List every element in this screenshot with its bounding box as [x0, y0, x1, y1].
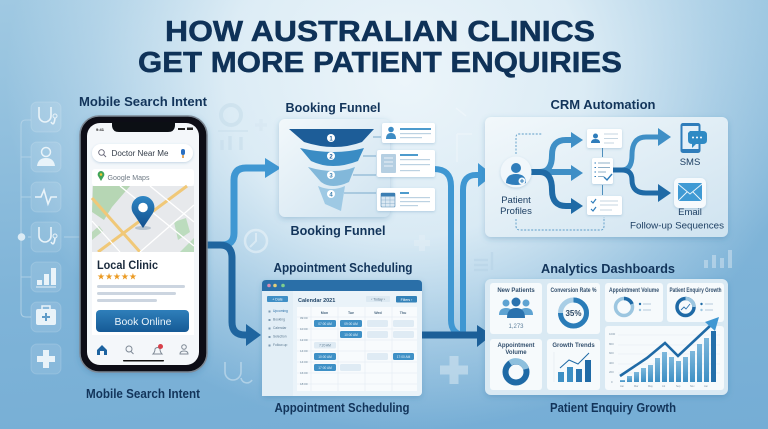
panel: calendar: [262, 280, 422, 396]
calendar grid: 10:00 AM: [344, 333, 358, 337]
calendar grid: 10:00: [300, 327, 308, 331]
calendar sidebar: Selection: [273, 334, 287, 338]
card: patient: [382, 123, 435, 143]
icon: doctor tile: [31, 142, 61, 172]
clinic card: Local Clinic: [97, 260, 159, 272]
title: GET MORE PATIENT ENQUIRIES: [138, 47, 622, 79]
calendar header: ‹ Today ›: [371, 298, 386, 302]
calendar sidebar: Upcoming: [273, 309, 288, 313]
card: growth trends: Growth Trends: [552, 343, 595, 349]
icon: map pin: [132, 196, 154, 230]
calendar grid: 18:00: [300, 382, 308, 386]
icon: first aid tile: [31, 302, 61, 332]
card: appointment volume donut: [490, 339, 542, 390]
title: HOW AUSTRALIAN CLINICS: [165, 16, 595, 48]
card: patient enquiry growth chart: May: [648, 385, 653, 388]
funnel chart: 2: [329, 154, 333, 160]
button: book online: Book Online: [114, 316, 172, 328]
card: appointment volume small: [605, 283, 663, 322]
icon: plus tile: [31, 344, 61, 374]
card: new patients: 1,273: [508, 324, 524, 330]
calendar grid: 17:00 AM: [318, 366, 332, 370]
icon: stethoscope tile two: [31, 222, 61, 252]
arrows: funnel and calendar to crm and analytics: [420, 163, 493, 347]
icon: sms phone: [680, 123, 707, 153]
heading: booking funnel: Booking Funnel: [286, 101, 380, 115]
calendar grid: Tue: [348, 311, 354, 315]
calendar grid: Mon: [321, 311, 328, 315]
icon: heartbeat tile: [31, 182, 61, 212]
heading: appointment scheduling: Appointment Scheduling: [274, 261, 412, 275]
card: conversion rate: Conversion Rate %: [550, 288, 597, 294]
label: sms: SMS: [680, 157, 700, 168]
map card: [92, 169, 194, 252]
card: patient enquiry growth chart: 200: [609, 370, 614, 374]
card: patient enquiry growth chart: 0: [611, 380, 613, 384]
phone: [80, 116, 207, 372]
funnel chart: 4: [329, 192, 333, 198]
caption: patient enquiry growth: Patient Enquiry Growth: [550, 401, 676, 415]
calendar grid: [297, 307, 417, 391]
calendar grid: 09:00: [300, 316, 308, 320]
card: appointment volume donut: Appointment: [498, 343, 534, 349]
label: follow-up sequences: Follow-up Sequences: [630, 220, 724, 232]
calendar sidebar: [262, 291, 293, 396]
card: patient enquiry growth chart: 800: [609, 342, 614, 346]
card: appointment volume small: Appointment Volume: [609, 288, 660, 294]
card: profile: [587, 129, 622, 148]
funnel chart: 1: [329, 136, 333, 142]
card: patient enquiry growth chart: [605, 317, 724, 390]
calendar sidebar: Booking: [273, 318, 285, 322]
icon: bars tile: [31, 262, 61, 292]
calendar grid: 7:20 AM: [319, 344, 331, 348]
calendar grid: Thu: [400, 311, 406, 315]
card: patient enquiry growth small: Patient Enquiry Growth: [670, 288, 722, 294]
calendar grid: 12:00: [300, 338, 308, 342]
caption: booking funnel: Booking Funnel: [290, 224, 386, 238]
caption: mobile search intent: Mobile Search Intent: [86, 387, 201, 401]
label: patient profiles: [500, 195, 532, 217]
heading: crm automation: CRM Automation: [550, 98, 656, 112]
calendar grid: 09:00 AM: [344, 322, 358, 326]
calendar grid: 10:00 AM: [318, 355, 332, 359]
card: calendar: [377, 188, 435, 211]
caption: appointment scheduling: Appointment Scheduling: [274, 401, 410, 415]
card: patient enquiry growth chart: 600: [609, 351, 614, 355]
phone navigation: [97, 344, 188, 362]
card: growth trends: [547, 339, 600, 390]
panel: booking funnel: [279, 119, 435, 217]
card: patient enquiry growth chart: Sep: [676, 385, 681, 388]
title: [138, 16, 622, 79]
card: form: [377, 150, 435, 177]
card: patient enquiry growth chart: Nov: [690, 385, 695, 388]
card: patient enquiry growth chart: Jan: [704, 385, 709, 388]
card: patient enquiry growth chart: 400: [609, 361, 614, 365]
card: checklist: [592, 158, 613, 184]
calendar header: Filters ›: [401, 298, 413, 302]
label: email: Email: [678, 207, 702, 218]
search bar: Doctor Near Me: [112, 149, 169, 158]
card: tasks: [587, 196, 622, 215]
heading: mobile search intent: Mobile Search Intent: [79, 95, 208, 109]
card: conversion rate: 35%: [565, 309, 582, 318]
card: conversion rate: [547, 283, 600, 334]
funnel chart: 3: [329, 174, 333, 180]
label: patient profiles: Patient: [501, 195, 531, 206]
heading: analytics dashboards: Analytics Dashboards: [541, 262, 675, 276]
card: new patients: [490, 283, 542, 334]
map card: Google Maps: [108, 175, 150, 182]
panel: analytics dashboards: [485, 279, 728, 395]
calendar grid: 16:00: [300, 371, 308, 375]
clinic card: ★★★★★: [97, 272, 137, 282]
calendar grid: 14:00: [300, 360, 308, 364]
calendar grid: 17:00 AM: [397, 355, 411, 359]
crm flow arrows: [516, 128, 671, 230]
clinic card: [92, 252, 194, 335]
label: patient profiles: Profiles: [500, 206, 532, 217]
calendar grid: 07:00 AM: [318, 322, 332, 326]
card: appointment volume donut: Volume: [505, 350, 527, 356]
card: new patients: New Patients: [497, 288, 535, 294]
sidebar: healthcare icons: [18, 102, 80, 374]
decorative faded icons: [218, 105, 730, 384]
icon: stethoscope tile: [31, 102, 61, 132]
funnel chart: [289, 129, 381, 211]
card: patient enquiry growth chart: 1000: [609, 332, 616, 336]
card: patient enquiry growth small: [667, 283, 724, 322]
panel: crm automation: [485, 117, 728, 237]
phone: 9:41: [96, 127, 105, 132]
calendar grid: Wed: [374, 311, 382, 315]
calendar sidebar: + Date: [272, 298, 283, 302]
card: patient enquiry growth chart: Mar: [634, 385, 638, 388]
calendar sidebar: Follow-up: [273, 343, 287, 347]
search bar: [92, 144, 193, 162]
calendar sidebar: Calendar: [273, 326, 287, 330]
icon: email: [674, 178, 706, 208]
calendar header: Calendar 2021: [298, 298, 335, 304]
card: patient enquiry growth chart: Jul: [662, 385, 666, 388]
calendar grid: 14:00: [300, 349, 308, 353]
card: patient enquiry growth chart: Jan: [620, 385, 625, 388]
arrows: phone to funnel and calendar: [205, 158, 281, 346]
calendar header: [298, 296, 417, 304]
icon: patient profiles: [500, 156, 532, 188]
